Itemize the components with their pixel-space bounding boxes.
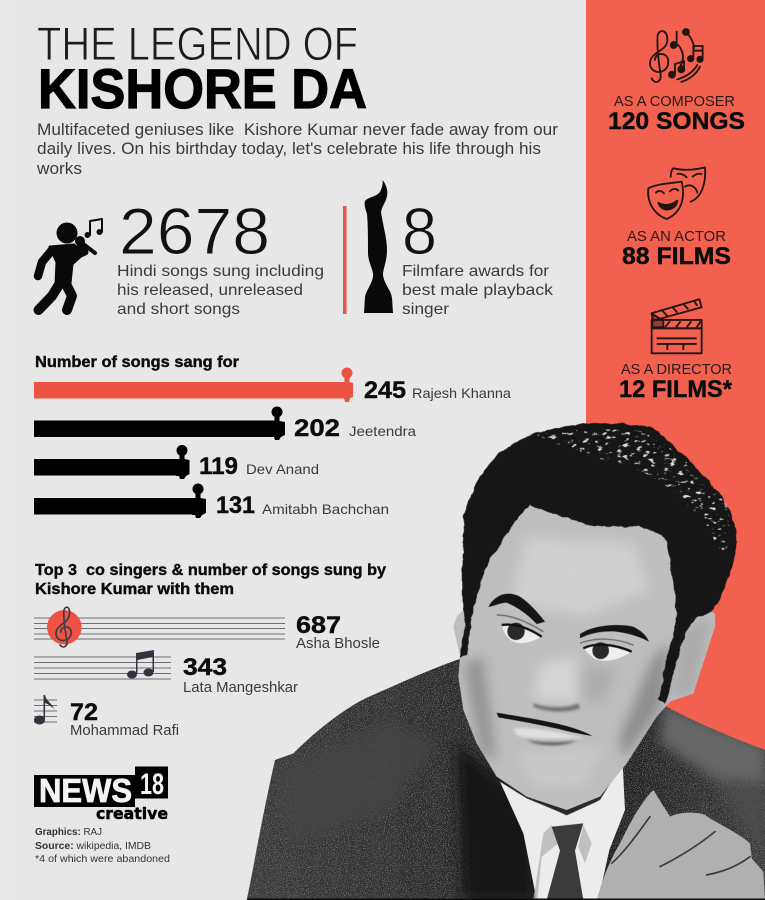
stat: 2678 Hindi songs: and short songs — [117, 301, 240, 318]
bar: Amitabh Bachchan 131: 131 — [216, 492, 255, 519]
bar: Amitabh Bachchan 131 — [34, 484, 389, 519]
icon: composer music notes — [650, 29, 703, 82]
hair — [460, 423, 737, 704]
hand — [597, 790, 765, 900]
tie — [547, 823, 583, 900]
right eye — [580, 639, 633, 661]
bar: Dev Anand 119: Dev Anand — [246, 461, 319, 477]
bottom edge — [247, 898, 765, 900]
collar shadow — [533, 825, 592, 900]
intro text: works — [36, 160, 82, 178]
stave: Asha Bhosle 687: 687 — [296, 612, 341, 639]
icon: single note — [34, 695, 54, 724]
stave: Mohammad Rafi 72: 72 — [70, 699, 98, 726]
text: as an actor: 88 FILMS — [622, 243, 731, 270]
title — [37, 17, 367, 120]
text: as a director — [619, 361, 733, 403]
stave: Asha Bhosle 687: Asha Bhosle — [296, 636, 380, 652]
bar: Rajesh Khanna 245: Rajesh Khanna — [412, 385, 511, 401]
lips — [513, 728, 585, 739]
stat: 2678 Hindi songs: his released, unreleased — [117, 282, 303, 299]
jacket — [247, 658, 765, 900]
credits: Graphics: RAJ — [35, 826, 102, 838]
stat: 8 Filmfare awards: singer — [402, 301, 450, 318]
bar: Dev Anand 119 — [34, 445, 319, 480]
stave: Lata Mangeshkar 343 — [34, 650, 298, 696]
stave: Mohammad Rafi 72 — [34, 695, 179, 739]
icon: singer with microphone — [38, 219, 102, 310]
stave: Mohammad Rafi 72: Mohammad Rafi — [70, 723, 179, 739]
heading: top 3 co singers: Top 3 co singers & number of songs sung by — [35, 562, 386, 579]
text: as a composer: 120 SONGS — [608, 108, 745, 135]
neck and chin shadow — [533, 793, 603, 815]
text: as a director: AS A DIRECTOR — [621, 361, 732, 378]
text: as a composer — [608, 93, 745, 135]
panel: red sidebar — [586, 0, 765, 770]
credits — [35, 826, 170, 865]
left eyebrow — [488, 594, 545, 624]
intro text: Multifaceted geniuses like Kishore Kumar never fade away from our — [37, 121, 559, 139]
stat: 2678 Hindi songs: Hindi songs sung including — [117, 263, 324, 280]
bar: Jeetendra 202 — [34, 406, 416, 442]
stat: 2678 Hindi songs — [117, 194, 324, 318]
moustache — [497, 713, 592, 736]
bar chart: songs per actor — [34, 368, 511, 519]
text: as an actor — [622, 228, 731, 270]
logo: News18 creative: 18 — [140, 768, 164, 801]
stave: Asha Bhosle 687 — [34, 607, 380, 652]
bar: Amitabh Bachchan 131: Amitabh Bachchan — [262, 501, 389, 517]
credits: *4 of which were abandoned — [35, 853, 170, 865]
heading: number of songs sang for: Number of songs sang for — [35, 354, 239, 371]
icon: theatre masks — [648, 167, 705, 219]
intro text: daily lives. On his birthday today, let's celebrate his life through his — [37, 140, 541, 158]
hand creases — [612, 817, 750, 875]
text: as a director: 12 FILMS* — [619, 376, 733, 403]
text: as an actor: AS AN ACTOR — [627, 228, 726, 245]
jacket highlights — [280, 703, 765, 900]
title: KISHORE DA — [38, 57, 367, 120]
bar: Rajesh Khanna 245 — [34, 368, 511, 404]
logo: News18 creative: NEWS — [39, 772, 132, 809]
heading: top 3 co singers — [35, 562, 386, 598]
face shading — [463, 537, 713, 787]
divider — [343, 206, 346, 314]
bar: Dev Anand 119: 119 — [199, 453, 238, 480]
text: as a composer: AS A COMPOSER — [614, 93, 735, 110]
logo: News18 creative: creative — [96, 804, 168, 823]
intro text — [36, 121, 559, 178]
portrait: Kishore Kumar — [247, 423, 765, 900]
left eye — [497, 615, 543, 643]
stat: 8 Filmfare awards: best male playback — [402, 282, 554, 299]
shirt — [500, 763, 625, 900]
hair highlights — [537, 429, 730, 557]
icon: beamed notes — [127, 650, 154, 678]
stat: 8 Filmfare awards — [402, 194, 554, 318]
bar: Jeetendra 202: 202 — [294, 415, 340, 442]
title: THE LEGEND OF — [37, 17, 358, 70]
stave: Lata Mangeshkar 343: 343 — [183, 654, 227, 681]
right eyebrow — [580, 625, 649, 642]
icon: filmfare trophy — [364, 180, 393, 313]
bar: Jeetendra 202: Jeetendra — [349, 423, 416, 439]
stat: 2678 Hindi songs: 2678 — [119, 194, 270, 268]
icon: film clapperboard — [652, 299, 702, 353]
bar: Rajesh Khanna 245: 245 — [364, 377, 406, 404]
heading: top 3 co singers: Kishore Kumar with them — [35, 581, 234, 598]
icon: treble clef — [56, 607, 71, 647]
nose shadow — [533, 703, 580, 712]
credits: Source: wikipedia, IMDB — [35, 840, 151, 852]
face — [453, 490, 715, 810]
stat: 8 Filmfare awards: 8 — [402, 194, 437, 268]
stat: 8 Filmfare awards: Filmfare awards for — [402, 263, 550, 280]
stave: Lata Mangeshkar 343: Lata Mangeshkar — [183, 680, 298, 696]
logo: News18 creative — [34, 766, 168, 823]
